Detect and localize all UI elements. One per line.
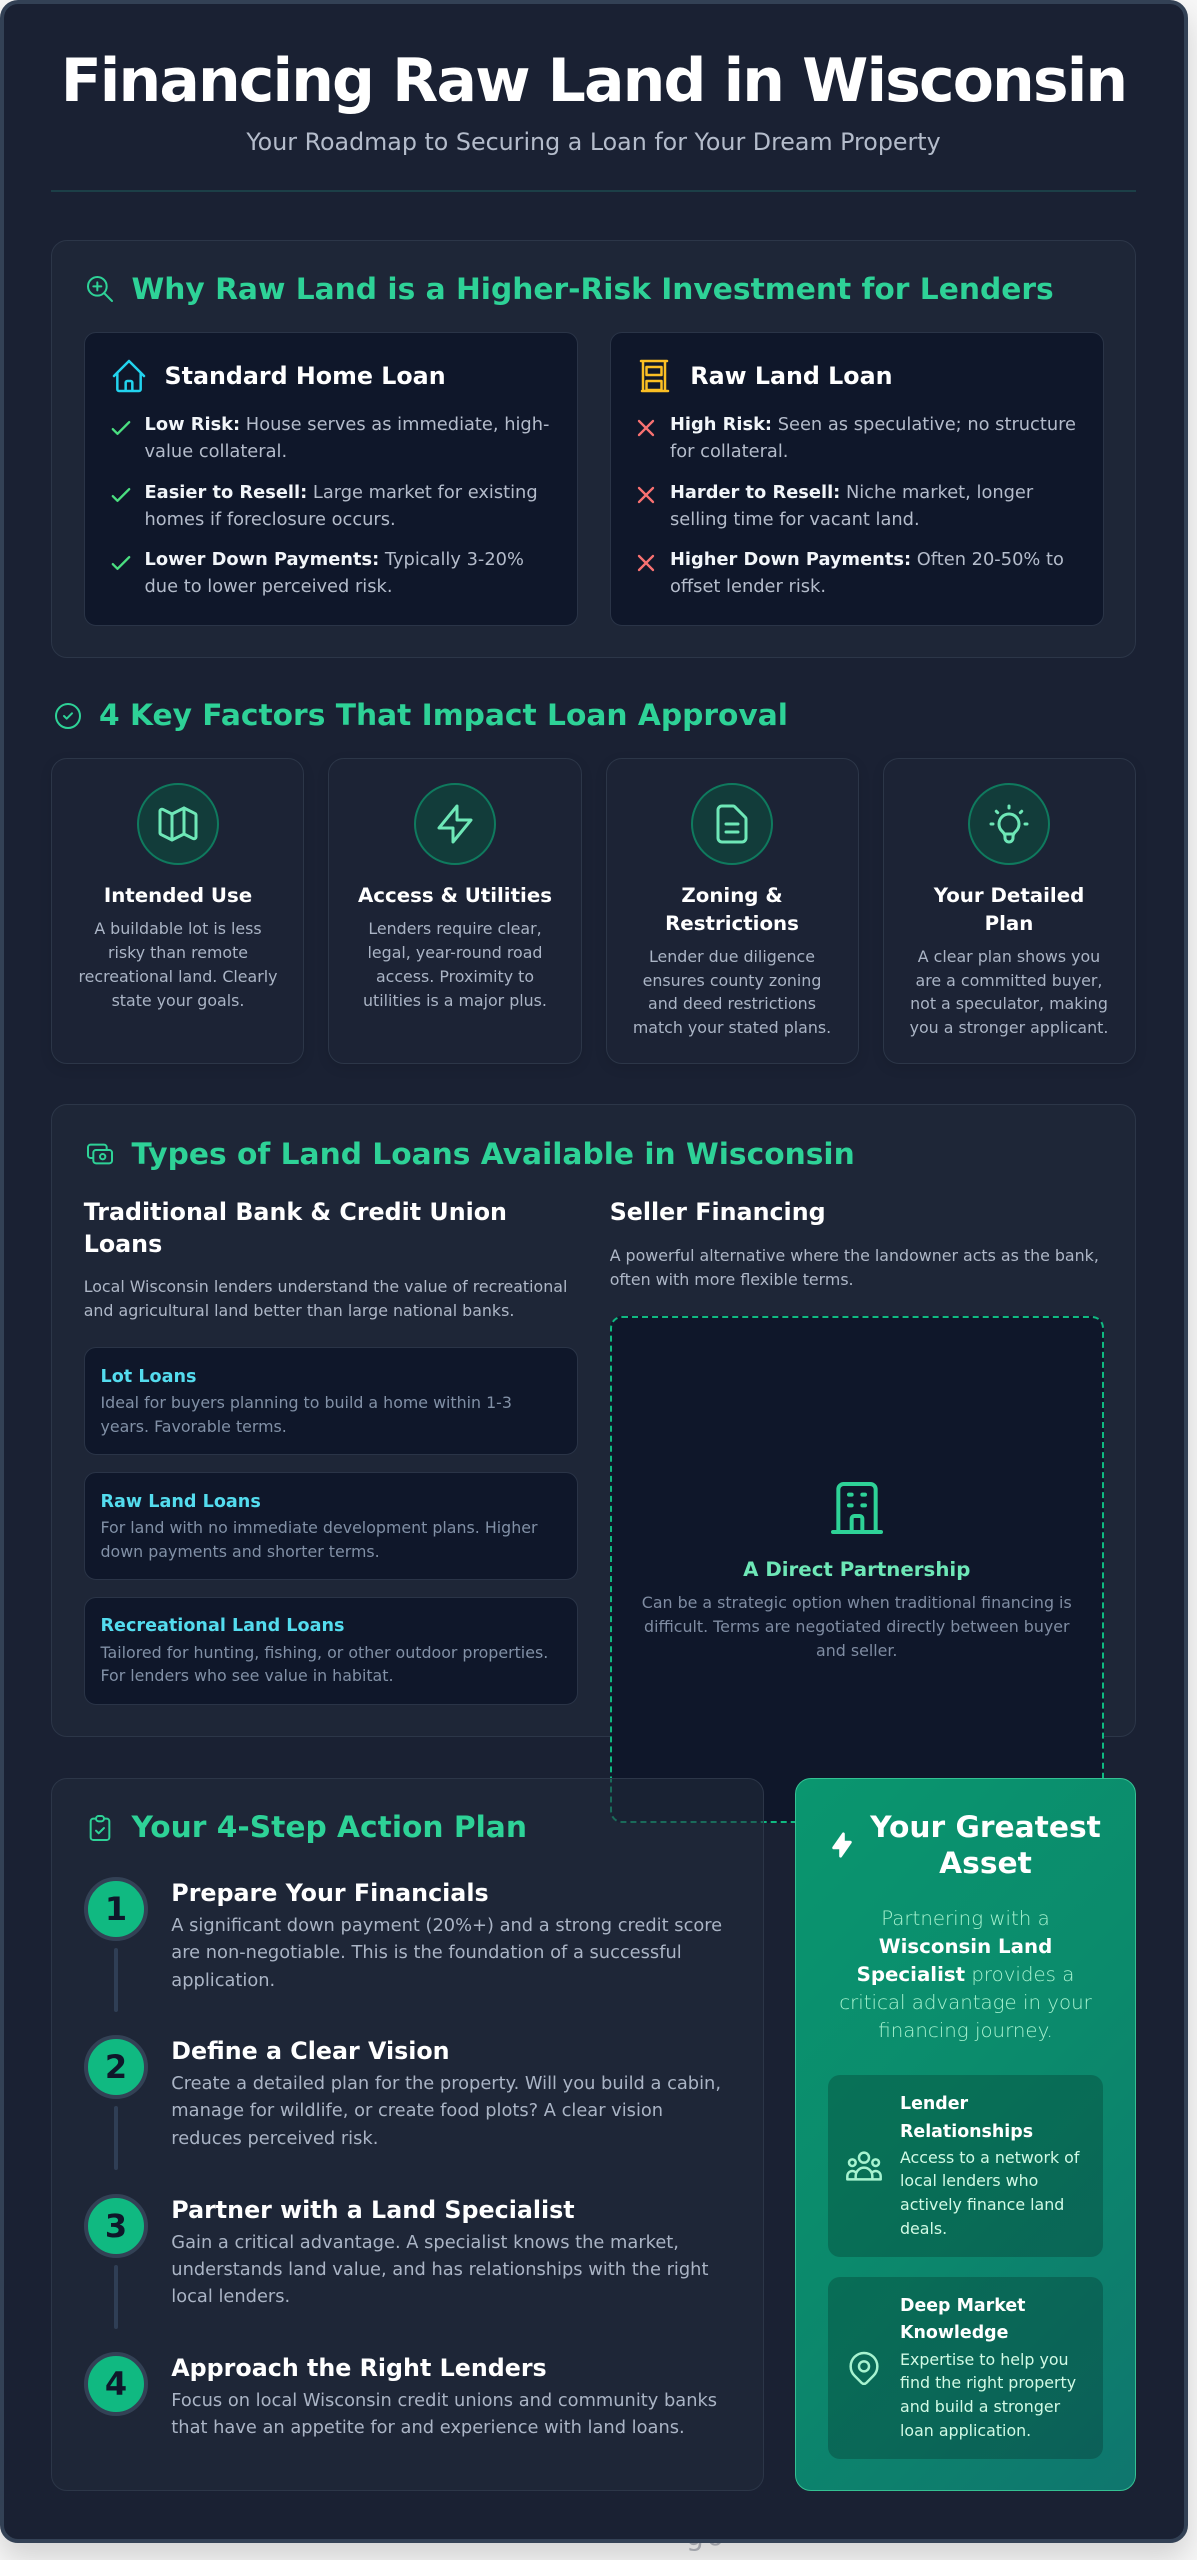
title: recreational land loans: Recreational Land Loans [100,1616,344,1636]
card text: zoning [633,947,831,1037]
text: land specialist: critical advantage in your [839,1991,1092,2014]
card text: zoning: and deed restrictions [648,994,816,1013]
text: lender relationships: deals. [900,2219,947,2238]
step 1 text: are non-negotiable. This is the foundation of a successful [171,1942,682,1963]
step number 3 [84,2194,148,2258]
card text: access and utilities: legal, year-round road [368,943,542,962]
list item: high risk: for collateral. [670,441,788,462]
step 4 title: Approach the Right Lenders [171,2354,547,2382]
card text: detailed plan [910,947,1108,1037]
text: recreational land loans [100,1643,548,1685]
step 4 text: Focus on local Wisconsin credit unions and community banks [171,2390,717,2411]
card: intended use [51,758,304,1064]
icon: user group [846,2151,882,2181]
title: lot loans: Lot Loans [100,1367,197,1387]
panel: action plan [51,1778,764,2491]
text: lot loans: Ideal for buyers planning to build a home within 1-3 [100,1393,512,1412]
card title: detailed plan [934,884,1084,934]
text: raw land loans: For land with no immediate development plans. Higher [100,1518,537,1537]
step number 4 [84,2352,148,2416]
heading: standard home loan: Standard Home Loan [164,362,446,390]
panel: types of land loans [51,1104,1136,1737]
card title: zoning [665,884,799,934]
heading: types of land loans: Types of Land Loans Available in Wisconsin [132,1137,855,1172]
icon: cash [87,1144,113,1164]
list item: high risk: High Risk: Seen as speculative; no structure [670,414,1076,435]
step 1 text [171,1915,722,1991]
card: zoning and restrictions [606,758,859,1064]
step 3 title: Partner with a Land Specialist [171,2196,575,2224]
title: deep market knowledge: Deep Market [900,2296,1025,2316]
step 1 text: A significant down payment (20%+) and a strong credit score [171,1915,722,1936]
card text: intended use [78,919,278,1010]
icon: light bulb [968,783,1050,865]
title: deep market knowledge [900,2293,1025,2348]
step number 1: 1 [105,1890,127,1928]
card text: detailed plan: you a stronger applicant. [910,1018,1108,1037]
card: raw land loans [84,1472,578,1580]
card text: detailed plan: A clear plan shows you [918,947,1100,966]
step 2 text [171,2073,721,2149]
text: seller financing: often with more flexible terms. [610,1270,854,1288]
callout text [642,1592,1072,1660]
text: raw land loans [100,1518,538,1561]
text: land specialist: Specialist provides a [857,1963,1074,1986]
subheading: traditional bank: Loans [84,1230,162,1258]
card text: access and utilities: utilities is a major plus. [363,991,547,1010]
list item: low risk: Low Risk: House serves as immediate, high- [144,414,549,435]
text: recreational land loans: Tailored for hunting, fishing, or other outdoor properties. [100,1643,548,1662]
card text: zoning: ensures county zoning [643,971,821,990]
step number 2: 2 [105,2048,127,2086]
icon: check circle [55,703,81,729]
heading: your greatest asset: Your Greatest [870,1810,1101,1844]
icon: raw land building [640,360,670,392]
card text: zoning: Lender due diligence [649,947,815,966]
text: lender relationships [900,2146,1079,2241]
icon: document [691,783,773,865]
text: land specialist: financing journey. [878,2019,1053,2042]
step 3 text: local lenders. [171,2286,290,2307]
list item: easier to resell: homes if foreclosure occurs. [144,509,396,530]
step 3 text: Gain a critical advantage. A specialist knows the market, [171,2232,679,2252]
heading: why raw land: Why Raw Land is a Higher-Risk Investment for Lenders [132,272,1054,306]
icon: check [112,556,130,570]
text: deep market knowledge: and build a stronger [900,2397,1060,2416]
card: access and utilities [328,758,582,1064]
icon: x mark [638,420,654,436]
card text: intended use: risky than remote [108,943,248,962]
title: lender relationships: Relationships [900,2122,1033,2142]
card text: access and utilities: access. Proximity to [376,967,534,986]
title: deep market knowledge: Knowledge [900,2323,1008,2343]
card text: intended use: recreational land. Clearly [78,967,278,986]
title: lender relationships: Lender [900,2094,968,2114]
card title: zoning: Zoning & [681,884,783,906]
card text: zoning: match your stated plans. [633,1018,831,1037]
list item: harder to resell [670,482,1034,530]
step 4 text [171,2390,717,2438]
icon: office building [831,1482,883,1534]
card text: detailed plan: are a committed buyer, [916,971,1102,990]
list item: low risk: value collateral. [144,441,287,462]
card: lender relationships [828,2075,1103,2257]
heading: action plan: Your 4-Step Action Plan [132,1810,527,1844]
list item: higher down payments: offset lender risk. [670,576,826,597]
text: deep market knowledge [900,2348,1076,2443]
text: seller financing [610,1246,1099,1288]
text: deep market knowledge: find the right property [900,2373,1076,2392]
subheading: seller financing: Seller Financing [610,1198,826,1226]
icon: home [112,360,146,392]
panel: standard home loan [84,332,578,626]
callout title: A Direct Partnership [743,1558,970,1581]
icon: lightning bolt [414,783,496,865]
icon: x mark [638,554,654,572]
heading: raw land loan: Raw Land Loan [690,362,893,390]
text: deep market knowledge: loan application. [900,2421,1031,2440]
heading: your greatest asset [870,1810,1101,1880]
icon: location marker [844,2348,884,2388]
text: raw land loans: down payments and shorter terms. [100,1542,380,1561]
callout: direct partnership box [610,1316,1104,1823]
step number 3: 3 [105,2207,127,2245]
heading: your greatest asset: Asset [939,1846,1032,1880]
step number 1 [84,1877,148,1941]
card text: detailed plan: not a speculator, making [910,994,1108,1013]
list item: higher down payments [670,549,1064,597]
card title: detailed plan: Your Detailed [934,884,1084,906]
card title: detailed plan: Plan [985,912,1033,934]
text: lender relationships: actively finance land [900,2195,1064,2214]
icon: zoom in [87,276,113,302]
icon: check [112,420,130,436]
step 4 text: that have an appetite for and experience with land loans. [171,2417,685,2438]
list item: harder to resell: selling time for vacant land. [670,509,920,530]
card text: intended use: state your goals. [112,991,244,1010]
panel: your greatest asset [795,1778,1136,2491]
card text: access and utilities: Lenders require clear, [368,919,542,938]
list item: lower down payments: due to lower perceived risk. [144,576,393,597]
card text: access and utilities [363,919,547,1010]
icon: solid bolt [832,1832,852,1858]
text: land specialist: Wisconsin Land [879,1935,1052,1958]
text: lot loans [100,1393,512,1436]
cropped footer text behind card: go [686,2519,727,2552]
list item: easier to resell [144,482,538,530]
text: lot loans: years. Favorable terms. [100,1417,287,1436]
step 2 text: reduces perceived risk. [171,2128,378,2149]
card title: access and utilities: Access & Utilities [358,884,552,906]
card: recreational land loans [84,1596,578,1704]
text: traditional bank: and agricultural land better than large national banks. [84,1301,514,1320]
card: detailed plan [883,758,1136,1064]
card text: intended use: A buildable lot is less [94,919,262,938]
icon: x mark [638,486,654,504]
panel: raw land loan [610,332,1104,626]
text: recreational land loans: For lenders who see value in habitat. [100,1666,394,1685]
title: Financing Raw Land in Wisconsin [61,46,1126,116]
text: seller financing: A powerful alternative where the landowner acts as the bank, [610,1246,1099,1264]
text: deep market knowledge: Expertise to help you [900,2350,1069,2369]
list item: high risk [670,414,1076,462]
list item: lower down payments: Lower Down Payments: Typically 3-20% [144,549,524,570]
step 2 text: manage for wildlife, or create food plots? A clear vision [171,2100,663,2121]
step 2 title: Define a Clear Vision [171,2037,450,2065]
list item: easier to resell: Easier to Resell: Large market for existing [144,482,538,503]
text: traditional bank: Local Wisconsin lenders understand the value of recreational [84,1277,567,1296]
title: lender relationships [900,2091,1033,2146]
step 1 text: application. [171,1970,275,1991]
step number 2 [84,2035,148,2099]
callout text: and seller. [816,1640,897,1660]
icon: clipboard check [90,1815,110,1841]
icon: map [137,783,219,865]
icon: check [112,488,130,502]
callout text: difficult. Terms are negotiated directly between buyer [644,1616,1069,1636]
subtitle: Your Roadmap to Securing a Loan for Your Dream Property [246,128,941,156]
list item: harder to resell: Harder to Resell: Niche market, longer [670,482,1033,503]
panel: why raw land is higher risk [51,240,1136,658]
card: deep market knowledge [828,2277,1103,2459]
card title: zoning: Restrictions [665,912,799,934]
text: traditional bank [84,1277,567,1320]
text: lender relationships: Access to a network of [900,2148,1079,2167]
subheading: traditional bank: Traditional Bank & Credit Union [84,1198,507,1226]
text: land specialist: Partnering with a [881,1907,1050,1930]
subheading: traditional bank [84,1198,507,1258]
text: lender relationships: local lenders who [900,2171,1038,2190]
title: raw land loans: Raw Land Loans [100,1492,261,1512]
card: lot loans [84,1347,578,1455]
step 3 text [171,2232,708,2307]
step 3 text: understands land value, and has relationships with the right [171,2259,708,2280]
step 1 title: Prepare Your Financials [171,1879,489,1907]
heading: key factors: 4 Key Factors That Impact Loan Approval [99,698,788,733]
step 2 text: Create a detailed plan for the property. Will you build a cabin, [171,2073,721,2094]
text: land specialist [839,1907,1092,2042]
step number 4: 4 [105,2365,127,2403]
list item: lower down payments [144,549,524,597]
card title: intended use: Intended Use [104,884,252,906]
callout text: Can be a strategic option when traditional financing is [642,1592,1072,1612]
list item: low risk [144,414,549,462]
list item: higher down payments: Higher Down Payments: Often 20-50% to [670,549,1064,570]
